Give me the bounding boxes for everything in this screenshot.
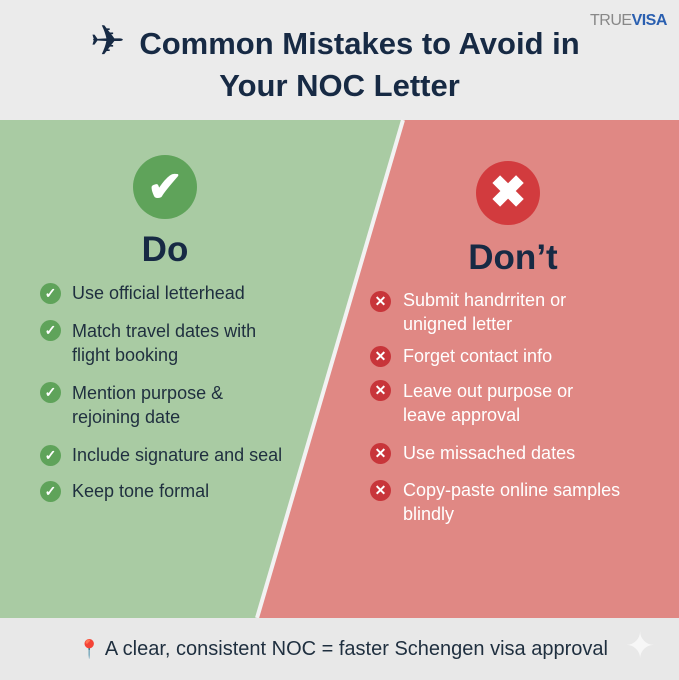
list: don't items: ✕ [375,445,386,461]
panel: don't [370,161,620,524]
icon: sparkle: ✦ [625,625,655,666]
list: don't items: ✕ [375,293,386,309]
list: do items: Mention purpose & [72,383,223,403]
list: do items: ✓ [45,384,56,400]
list: don't items: Leave out purpose or [403,381,573,401]
list: don't items: Use missached dates [403,443,575,463]
list: do items: ✓ [45,447,56,463]
list: don't items: leave approval [403,405,520,425]
icon: check circle [133,155,197,219]
list: don't items: ✕ [375,482,386,498]
heading: Don't: Don’t [468,238,558,277]
icon: airplane: ✈ [90,16,125,65]
title: Common Mistakes to Avoid in [139,26,580,61]
list: don't items: Forget contact info [403,346,552,366]
list: do items: ✓ [45,483,56,499]
icon: check circle: ✔ [147,163,183,210]
panel: do [40,155,282,502]
list: do items: Use official letterhead [72,283,245,303]
list: do items: Include signature and seal [72,445,282,465]
list: do items: ✓ [45,285,56,301]
list: don't items: Copy-paste online samples [403,480,620,500]
list: don't items: unigned letter [403,314,512,334]
title [139,26,580,103]
list: do items: Keep tone formal [72,481,209,501]
footer callout: 📍 A clear, consistent NOC = faster Schengen visa approval [78,638,608,660]
icon: x circle: ✖ [490,168,526,217]
title: Your NOC Letter [219,68,460,103]
list: do items: rejoining date [72,407,180,427]
list: don't items: blindly [403,504,454,524]
list: do items [40,283,282,502]
list: don't items [370,290,620,524]
icon: x circle [476,161,540,225]
list: do items: ✓ [45,322,56,338]
list: don't items: ✕ [375,382,386,398]
list: don't items: Submit handrriten or [403,290,566,310]
logo: TRUEVISA [590,12,667,29]
list: don't items: ✕ [375,348,386,364]
heading: Do: Do [142,230,188,269]
list: do items: flight booking [72,345,178,365]
list: do items: Match travel dates with [72,321,256,341]
